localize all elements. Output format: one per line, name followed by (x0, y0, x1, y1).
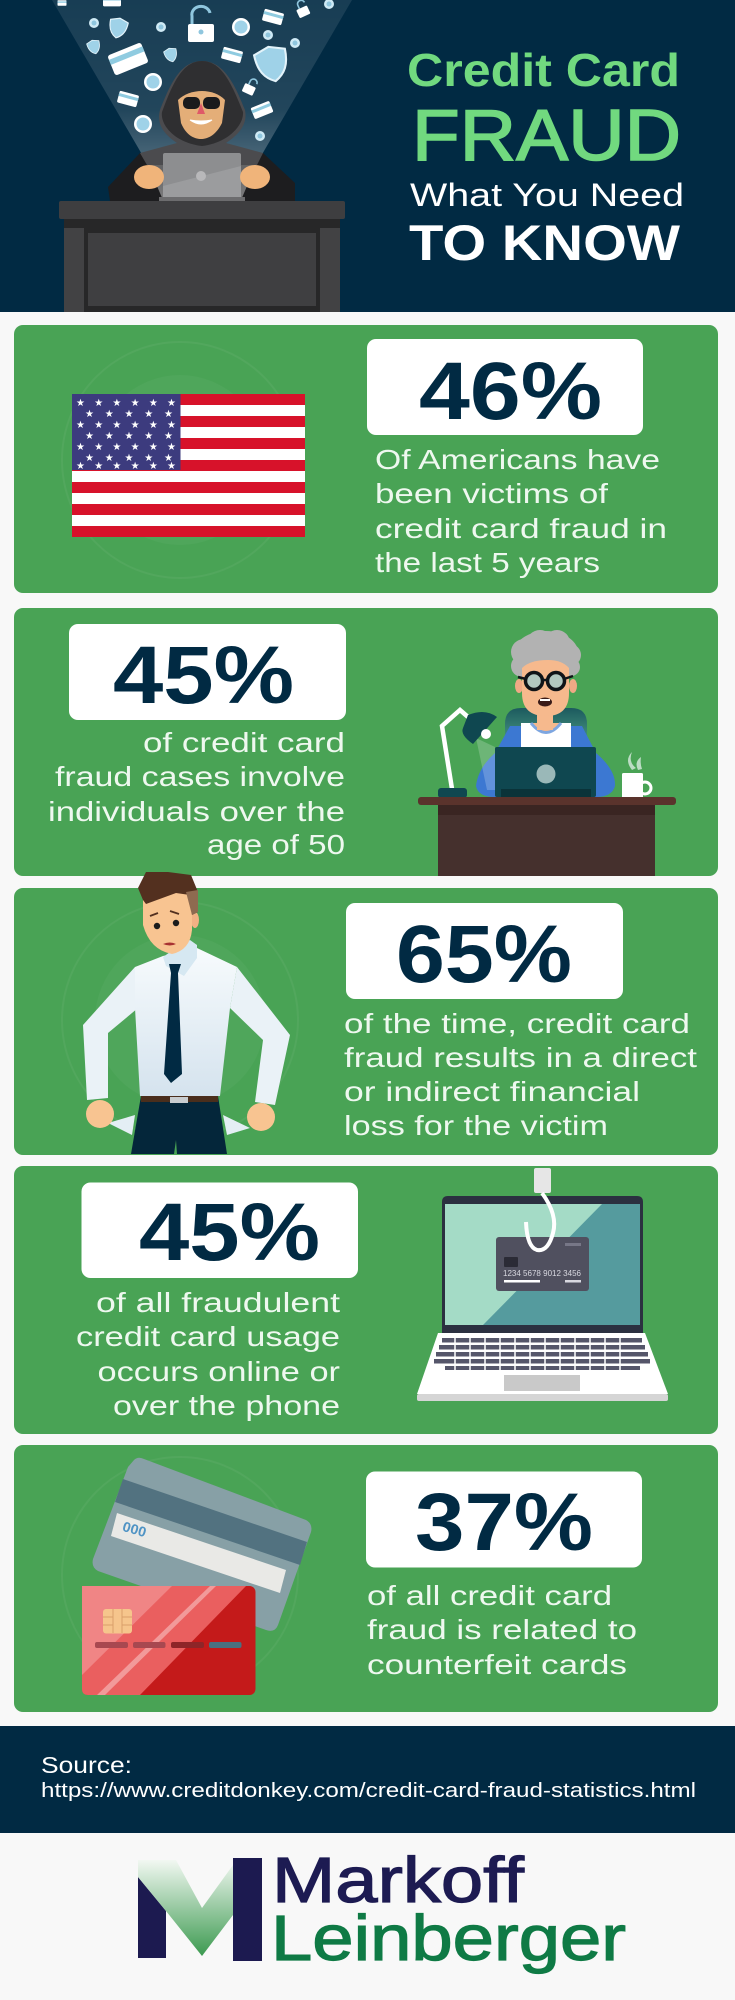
text block: occurs online or (98, 1356, 340, 1387)
stat box 37% (366, 1472, 642, 1568)
text block (48, 727, 345, 860)
stat box 45%: 45% (139, 1187, 320, 1278)
text block: of the time, credit card (344, 1008, 690, 1039)
text block: fraud cases involve (55, 761, 345, 792)
illustration: grandmother at laptop (418, 630, 676, 876)
title: TO KNOW (409, 215, 681, 271)
illustration: credit cards (82, 1458, 311, 1695)
panel: 65 percent financial loss (14, 872, 718, 1155)
illustration: man with empty pockets (83, 872, 290, 1154)
stat box 46% (367, 339, 643, 437)
text block: the last 5 years (375, 547, 600, 578)
icon: US flag: ★ ★ ★ ★ ★ (85, 431, 173, 442)
icon: fishing hook (526, 1168, 554, 1250)
title: What You Need (410, 177, 684, 213)
credit card on screen (496, 1237, 589, 1291)
stat box 45%: 45% (113, 630, 294, 721)
panel: 46 percent Americans (14, 325, 718, 593)
logo: Markoff Leinberger (138, 1844, 626, 1974)
panel: 37 percent counterfeit (14, 1445, 718, 1712)
panel: 45 percent over age 50 (14, 608, 718, 876)
icon: US flag: ★ ★ ★ ★ ★ (85, 409, 173, 420)
title (407, 44, 684, 271)
text block: loss for the victim (344, 1110, 608, 1141)
text block: or indirect financial (344, 1076, 640, 1107)
text block: credit card usage (76, 1321, 340, 1352)
hacker at desk illustration (52, 0, 352, 312)
stat box 45% (82, 1182, 358, 1278)
text block: fraud is related to (367, 1614, 637, 1645)
stat box 65% (346, 903, 623, 1000)
icon: US flag: ★ ★ ★ ★ ★ ★ (76, 461, 176, 472)
text block: individuals over the (48, 796, 345, 827)
source footer: Source: (41, 1752, 132, 1778)
text block: counterfeit cards (367, 1649, 627, 1680)
icon: US flag: ★ ★ ★ ★ ★ (85, 453, 173, 464)
stat box 45% (69, 624, 346, 721)
hacker desk (59, 201, 345, 312)
title: Credit Card (407, 44, 680, 96)
title: FRAUD (412, 96, 681, 176)
text block (76, 1287, 340, 1421)
stat box 65%: 65% (396, 909, 572, 1000)
source footer: https://www.creditdonkey.com/credit-card-fraud-statistics.html (41, 1780, 696, 1802)
text block: of all fraudulent (96, 1287, 340, 1318)
credit card on screen: 1234 5678 9012 3456 (503, 1269, 582, 1278)
icon: US flag (72, 394, 305, 537)
logo: Markoff Leinberger: Leinberger (271, 1902, 626, 1974)
icon: US flag: ★ ★ ★ ★ ★ ★ (76, 442, 176, 453)
text block (344, 1008, 697, 1141)
text block: of all credit card (367, 1580, 612, 1611)
illustration: phished laptop (417, 1168, 668, 1401)
text block: been victims of (375, 478, 608, 509)
text block: Of Americans have (375, 444, 660, 475)
source footer (0, 1726, 735, 1833)
text block: credit card fraud in (375, 513, 667, 544)
icon: M mark (138, 1858, 262, 1961)
text block: of credit card (143, 727, 345, 758)
text block: over the phone (113, 1390, 340, 1421)
stat box 37%: 37% (415, 1477, 593, 1568)
text block: fraud results in a direct (344, 1042, 697, 1073)
text block: age of 50 (207, 829, 345, 860)
panel: 45 percent online or phone (14, 1166, 718, 1434)
icon: US flag: ★ ★ ★ ★ ★ ★ (76, 398, 176, 409)
text block (375, 444, 667, 578)
illustration: credit cards: 000 (121, 1518, 149, 1540)
header banner (0, 0, 735, 312)
icon: US flag: ★ ★ ★ ★ ★ ★ (76, 420, 176, 431)
logo: Markoff Leinberger: Markoff (272, 1844, 524, 1916)
text block (367, 1580, 637, 1680)
stat box 46%: 46% (419, 346, 602, 437)
